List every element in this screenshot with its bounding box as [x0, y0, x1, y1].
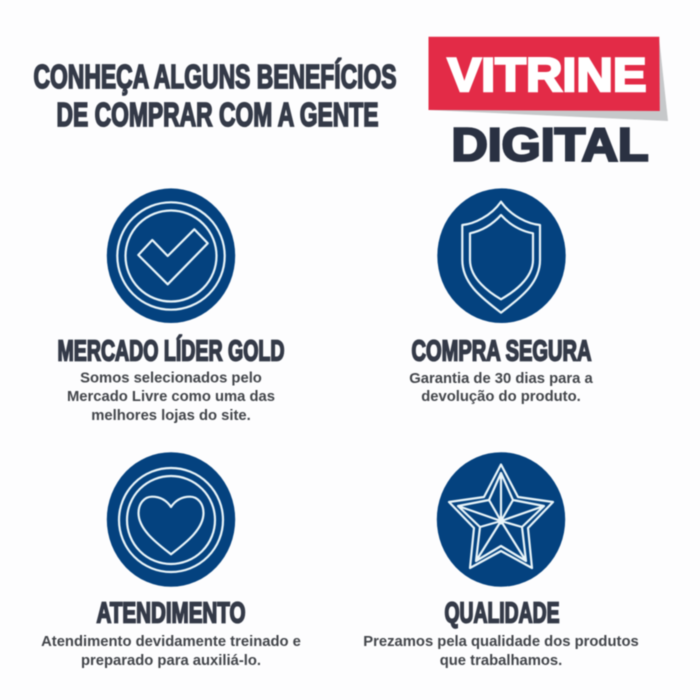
description: Mercado Livre como uma das	[67, 389, 275, 405]
description: preparado para auxiliá-lo.	[81, 653, 261, 669]
title: CONHEÇA ALGUNS BENEFÍCIOS	[34, 58, 396, 95]
icon: heart badge	[107, 452, 235, 587]
icon: star	[437, 452, 565, 587]
heading: COMPRA SEGURA	[412, 336, 592, 368]
heading: QUALIDADE	[444, 598, 560, 630]
panel: Qualidade	[363, 452, 639, 669]
title	[34, 58, 396, 133]
panel: Mercado Líder Gold	[58, 188, 284, 424]
description: devolução do produto.	[421, 389, 581, 405]
logo: Vitrine Digital: DIGITAL	[452, 118, 648, 170]
panel: Atendimento	[41, 452, 301, 669]
description: melhores lojas do site.	[91, 408, 251, 424]
description: Atendimento devidamente treinado e	[41, 634, 301, 650]
icon: check mark badge	[107, 188, 235, 323]
logo: Vitrine Digital	[428, 37, 668, 171]
description: Prezamos pela qualidade dos produtos	[363, 634, 639, 650]
description: Garantia de 30 dias para a	[409, 371, 593, 387]
description: Somos selecionados pelo	[80, 370, 262, 386]
icon: shield	[437, 188, 566, 323]
heading: MERCADO LÍDER GOLD	[58, 336, 284, 368]
description: que trabalhamos.	[440, 653, 562, 669]
title: DE COMPRAR COM A GENTE	[56, 96, 378, 133]
logo: Vitrine Digital: VITRINE	[448, 48, 646, 101]
panel: Compra Segura	[409, 188, 593, 405]
heading: ATENDIMENTO	[96, 598, 246, 630]
